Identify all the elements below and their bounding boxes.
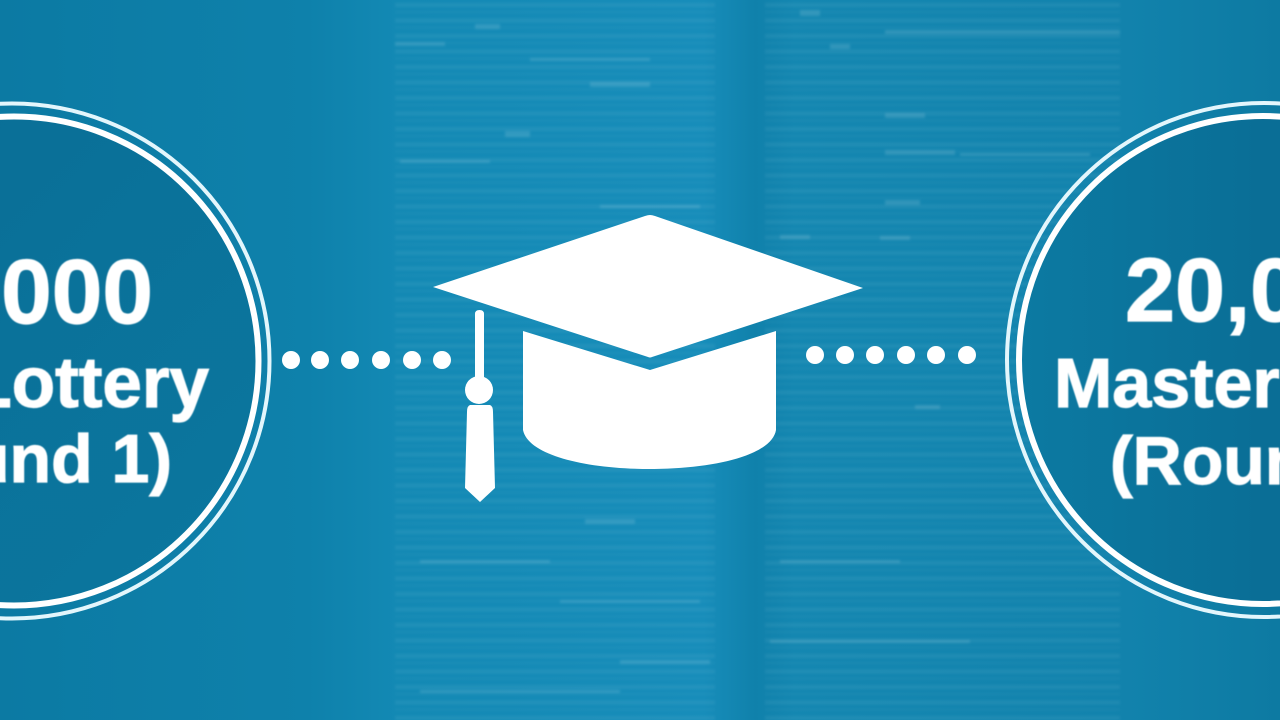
icon: graduation cap (433, 215, 863, 502)
right circle outer ring (1007, 103, 1280, 617)
tassel (465, 310, 495, 502)
left circle inner ring (0, 116, 258, 606)
right dotted connector (806, 346, 976, 364)
cap board (433, 215, 863, 358)
right circle disc (1018, 115, 1280, 605)
panel: left circle, lottery round 1 (0, 104, 270, 618)
cap body (523, 331, 776, 469)
right circle inner ring (1019, 116, 1280, 604)
left circle disc (0, 117, 257, 605)
left circle outer ring (0, 104, 270, 618)
panel: right circle, master's round 2 (1007, 103, 1280, 617)
left circle text (0, 242, 210, 497)
left dotted connector (282, 351, 451, 369)
right circle text (1054, 241, 1280, 499)
background data table texture (395, 0, 1120, 720)
